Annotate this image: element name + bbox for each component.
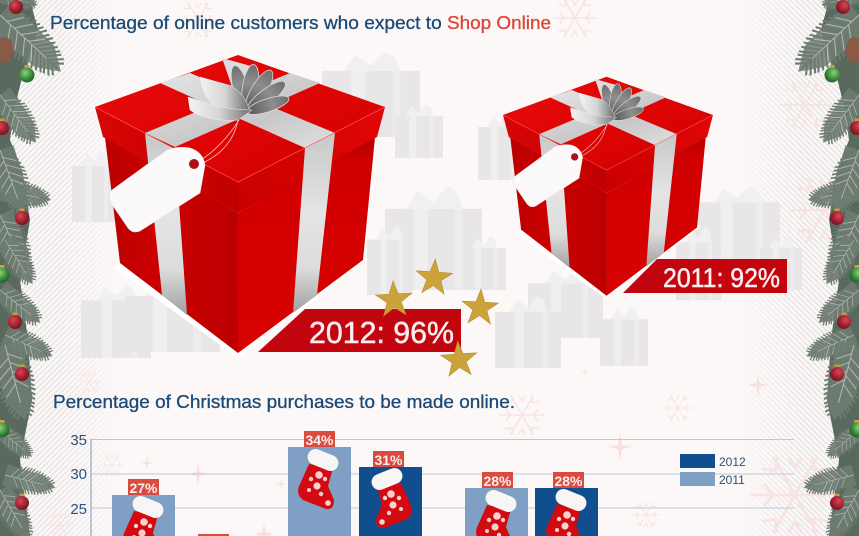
legend xyxy=(680,454,746,487)
bar 2011 28%: 28% xyxy=(483,473,512,489)
banner: 2011 92%: 2011: 92% xyxy=(663,263,780,293)
bar 2012 31% xyxy=(359,451,422,536)
bar 2011 27% xyxy=(112,479,175,536)
banner: 2012 96%: 2012: 96% xyxy=(309,315,454,350)
bar 2011 34%: 34% xyxy=(305,432,334,448)
chart axis and grid xyxy=(91,439,794,536)
banner: 2011 92% xyxy=(623,259,787,293)
legend: 2011 xyxy=(719,473,745,487)
right garland with ornaments xyxy=(784,0,859,536)
y axis labels: 30 xyxy=(70,466,87,483)
banner: 2012 96% xyxy=(258,309,461,352)
y axis labels: 35 xyxy=(70,432,87,449)
heading: Christmas purchases: Percentage of Christmas purchases to be made online. xyxy=(53,392,515,412)
bar 2012 28%: 28% xyxy=(554,473,583,489)
legend: 2012 xyxy=(719,455,746,469)
title: Percentage of online customers who expect to Shop Online xyxy=(50,13,551,33)
y axis labels xyxy=(70,432,87,518)
y axis labels: 25 xyxy=(70,501,87,518)
gold stars xyxy=(375,258,499,377)
bar 2012 28% xyxy=(535,472,598,536)
gift box 2011 xyxy=(503,77,713,299)
bar chart xyxy=(70,431,794,536)
bar 2011 34% xyxy=(288,431,351,536)
faint background gifts xyxy=(72,52,802,368)
bar 2011 28% xyxy=(465,472,528,536)
bar stub label xyxy=(198,534,229,536)
left garland with ornaments xyxy=(0,0,75,536)
bar 2012 31%: 31% xyxy=(374,452,403,468)
bar 2011 27%: 27% xyxy=(129,480,158,496)
gift box 2012 xyxy=(95,55,385,358)
